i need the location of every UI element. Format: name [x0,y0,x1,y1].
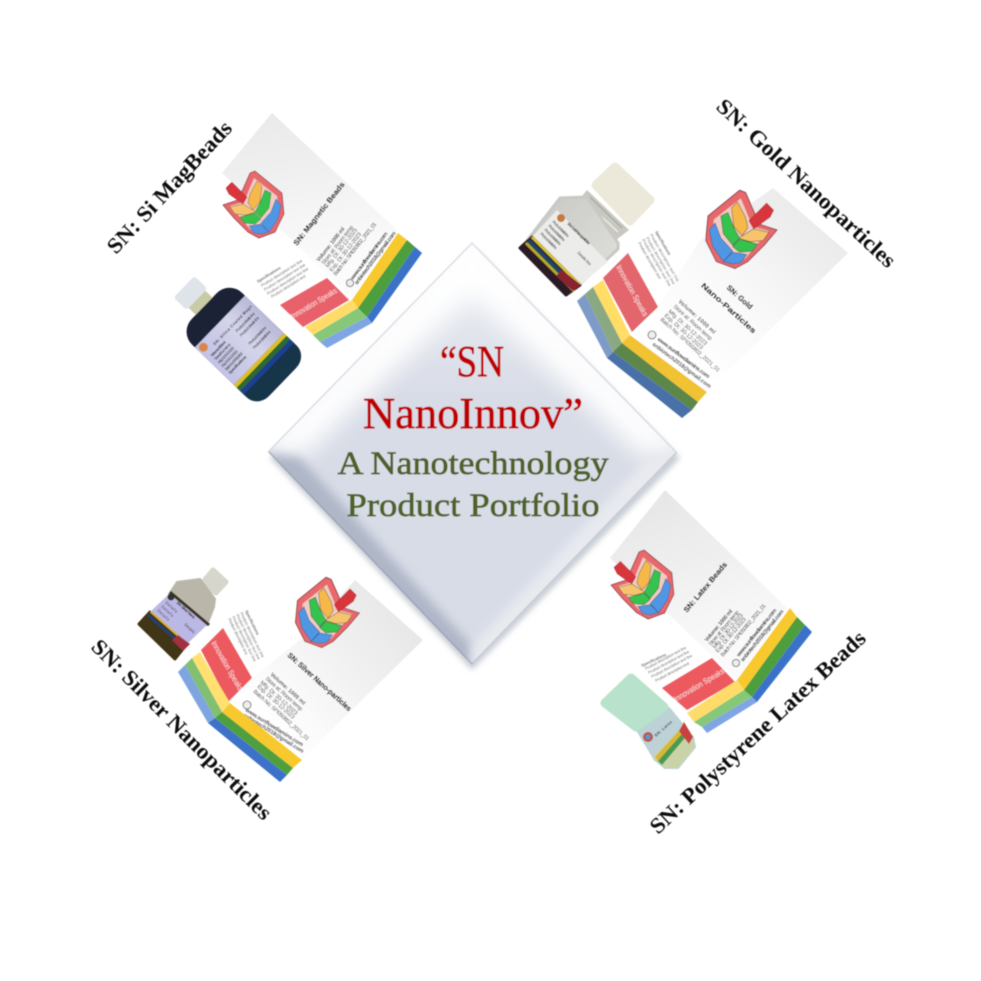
bottle: gold nanoparticles: SN: Gold Nanoparticles [566,221,592,246]
panel: central diamond [268,242,681,671]
red banner: Innovation Speaks [209,640,245,692]
bottle: silica coated beads: Product details line [252,329,272,350]
bottle: silver nanoparticles: Details [156,608,171,622]
bottle: silica coated beads: Product details line [247,324,268,346]
red banner: Innovation Speaks [289,286,339,321]
batch details: Volume: 1000 ml [269,672,306,707]
batch details: Batch No: SPI050802_2021_01 [333,222,378,277]
specification text: Product description text line [650,653,694,679]
red banner [662,658,735,710]
bottle: gold nanoparticles: Product details line [551,219,571,239]
box card face [230,580,423,758]
bottle: silica coated beads: Product details line [239,315,261,337]
specification text: Specifications [640,652,668,668]
batch details: Store at: Room temp [321,225,355,266]
title: SN NanoInnov: NanoInnov” [363,389,583,438]
label: SN: Silver Nanoparticles: SN: Silver Nanoparticles [86,634,278,825]
bottle: gold nanoparticles: Product details line [547,223,567,243]
subtitle: A Nanotechnology Product Portfolio [338,446,609,524]
product name: SN: Latex Beads [682,560,729,614]
product name: Nano-Particles [699,281,758,335]
bottle: silver nanoparticles: SN: Silver Nano [175,600,197,620]
product name [699,281,758,335]
panel: Latex Beads box [610,490,812,733]
label: SN: Polystyrene Latex Beads: SN: Polystyrene Latex Beads [644,625,871,839]
batch details: Volume: 1000 ml [316,226,347,263]
stripes [178,652,302,782]
bottle: silver nanoparticles: Details [160,604,175,618]
bottle: gold nanoparticles [520,167,650,295]
bottle: silica coated beads: Batch No: SPI050802 [224,350,244,372]
red banner: Innovation Speaks [672,667,726,704]
logo: shield [706,190,777,269]
red banner [603,253,658,332]
label: SN: Gold Nanoparticles: SN: Gold Nanoparticles [712,93,902,273]
red banner: Innovation Speaks [614,264,650,318]
batch details: Exp. Dt: 30-12-2023 [663,313,704,351]
batch details: Mfg. Dt: 30-12-2023 [325,228,359,269]
batch details: Volume: 1000 ml [677,299,717,336]
box card face [610,490,787,680]
specification text [256,258,310,299]
specification text: Specifications [244,609,261,637]
bottle: polystyrene latex beads [605,678,695,768]
specification text: Specifications [654,230,672,257]
bottle: silica coated beads: SN: Silica Coated Magn [212,304,253,346]
specification text: Product description text line [645,236,677,286]
specification text: Product description text [270,273,307,299]
box card face [630,188,848,392]
title: SN NanoInnov [363,337,583,438]
batch details: Volume: 1000 ml [704,608,735,643]
specification text [227,609,266,663]
batch details: Exp. Dt: 30-12-2023 [256,684,295,721]
bottle: silica coated beads: Exp. Dt: 30-12-2023 [220,348,239,368]
stripes [305,233,422,348]
label: SN: Si MagBeads: SN: Si MagBeads [101,115,237,258]
batch details: Store at: Room temp [708,610,741,647]
specification text: Product description text line [260,258,304,288]
contact details: snbiotech2018@gmail.com [354,231,398,286]
contact details: www.sunflowdiamins.com [243,707,304,748]
bottle: silica coated beads: Store at: Room temp [213,341,232,361]
contact details: snbiotech2018@gmail.com [242,713,304,755]
bottle: gold nanoparticles: Product details line [543,227,563,247]
batch details: Mfg. Dt: 30-12-2023 [259,680,298,717]
batch details: Batch No: SPI050802_2021_01 [252,689,310,742]
specification text: Product description text line [266,266,310,296]
batch details: Store at: Room temp [672,304,713,342]
title: SN NanoInnov: “SN [440,337,504,386]
contact details: www.sunflowdiamins.com [655,336,711,380]
bottle: gold nanoparticles: Details line [576,250,593,267]
bottle: silica coated beads: Specifications [227,354,248,375]
batch details: Batch No: SPI050802_2021_01 [720,603,768,658]
logo: shield [295,577,360,648]
bottle: silica coated beads [159,261,308,408]
contact details: www.sunflowdiamins.com [349,231,390,282]
bottle: silica coated beads: Volume: 500 ml [209,340,227,358]
bottle: silver nanoparticles: Details [183,622,196,634]
panel: Silver Nanoparticles box [178,577,423,782]
product name: SN: Magnetic Beads [291,180,347,247]
specification text: Product description text [227,617,250,656]
bottle: silica coated beads: Product details line [234,310,256,333]
contact details: snbiotech2018@gmail.com [740,609,785,663]
batch details: Batch No: SPI050802_2021_01 [659,317,721,374]
bottle: polystyrene latex beads: SN: Latex [653,719,674,738]
contact details: snbiotech2018@gmail.com [651,342,712,390]
logo: shield [611,550,674,619]
specification text: Product description text line [239,611,266,659]
specification text: Product description text line [263,262,307,292]
contact details: www.sunflowdiamins.com [735,608,778,659]
stripes [687,608,812,733]
batch details: Mfg. Dt: 30-12-2023 [667,309,708,347]
bottle: silica coated beads: Mfg. Dt: 30-12-2023 [216,345,236,365]
product name: SN: Silver Nano-particles [286,651,353,713]
specification text: Product description text line [641,238,673,288]
bottle: gold nanoparticles: Product details line [539,231,559,251]
product name: SN: Gold [725,283,755,311]
stripes [577,280,707,418]
batch details: Exp. Dt: 30-12-2023 [329,232,363,273]
batch details: Exp. Dt: 30-12-2023 [715,617,748,654]
subtitle: A Nanotechnology Product Portfolio: A Nanotechnology [338,446,609,482]
logo: shield [223,171,284,238]
specification text [640,645,694,683]
specification text: Product description text line [235,613,262,661]
specification text: Specifications [256,265,282,284]
panel: Si MagBeads box [222,113,422,348]
panel: Gold Nanoparticles box [577,188,848,418]
bottle: silver nanoparticles [139,570,226,659]
specification text: Product description text line [644,645,688,671]
subtitle: A Nanotechnology Product Portfolio: Product Portfolio [346,488,600,524]
specification text [637,230,681,288]
box card face [222,113,397,298]
red banner [201,628,252,702]
bottle: silver nanoparticles: Details [164,600,179,614]
specification text: Product description text line [231,615,258,663]
batch details: Mfg. Dt: 30-12-2023 [712,613,745,650]
specification text: Product description text line [649,233,681,283]
specification text: Product description text [654,660,691,683]
specification text: Product description text line [647,649,691,675]
specification text: Product description text [637,241,663,281]
batch details: Store at: Room temp [264,676,303,713]
